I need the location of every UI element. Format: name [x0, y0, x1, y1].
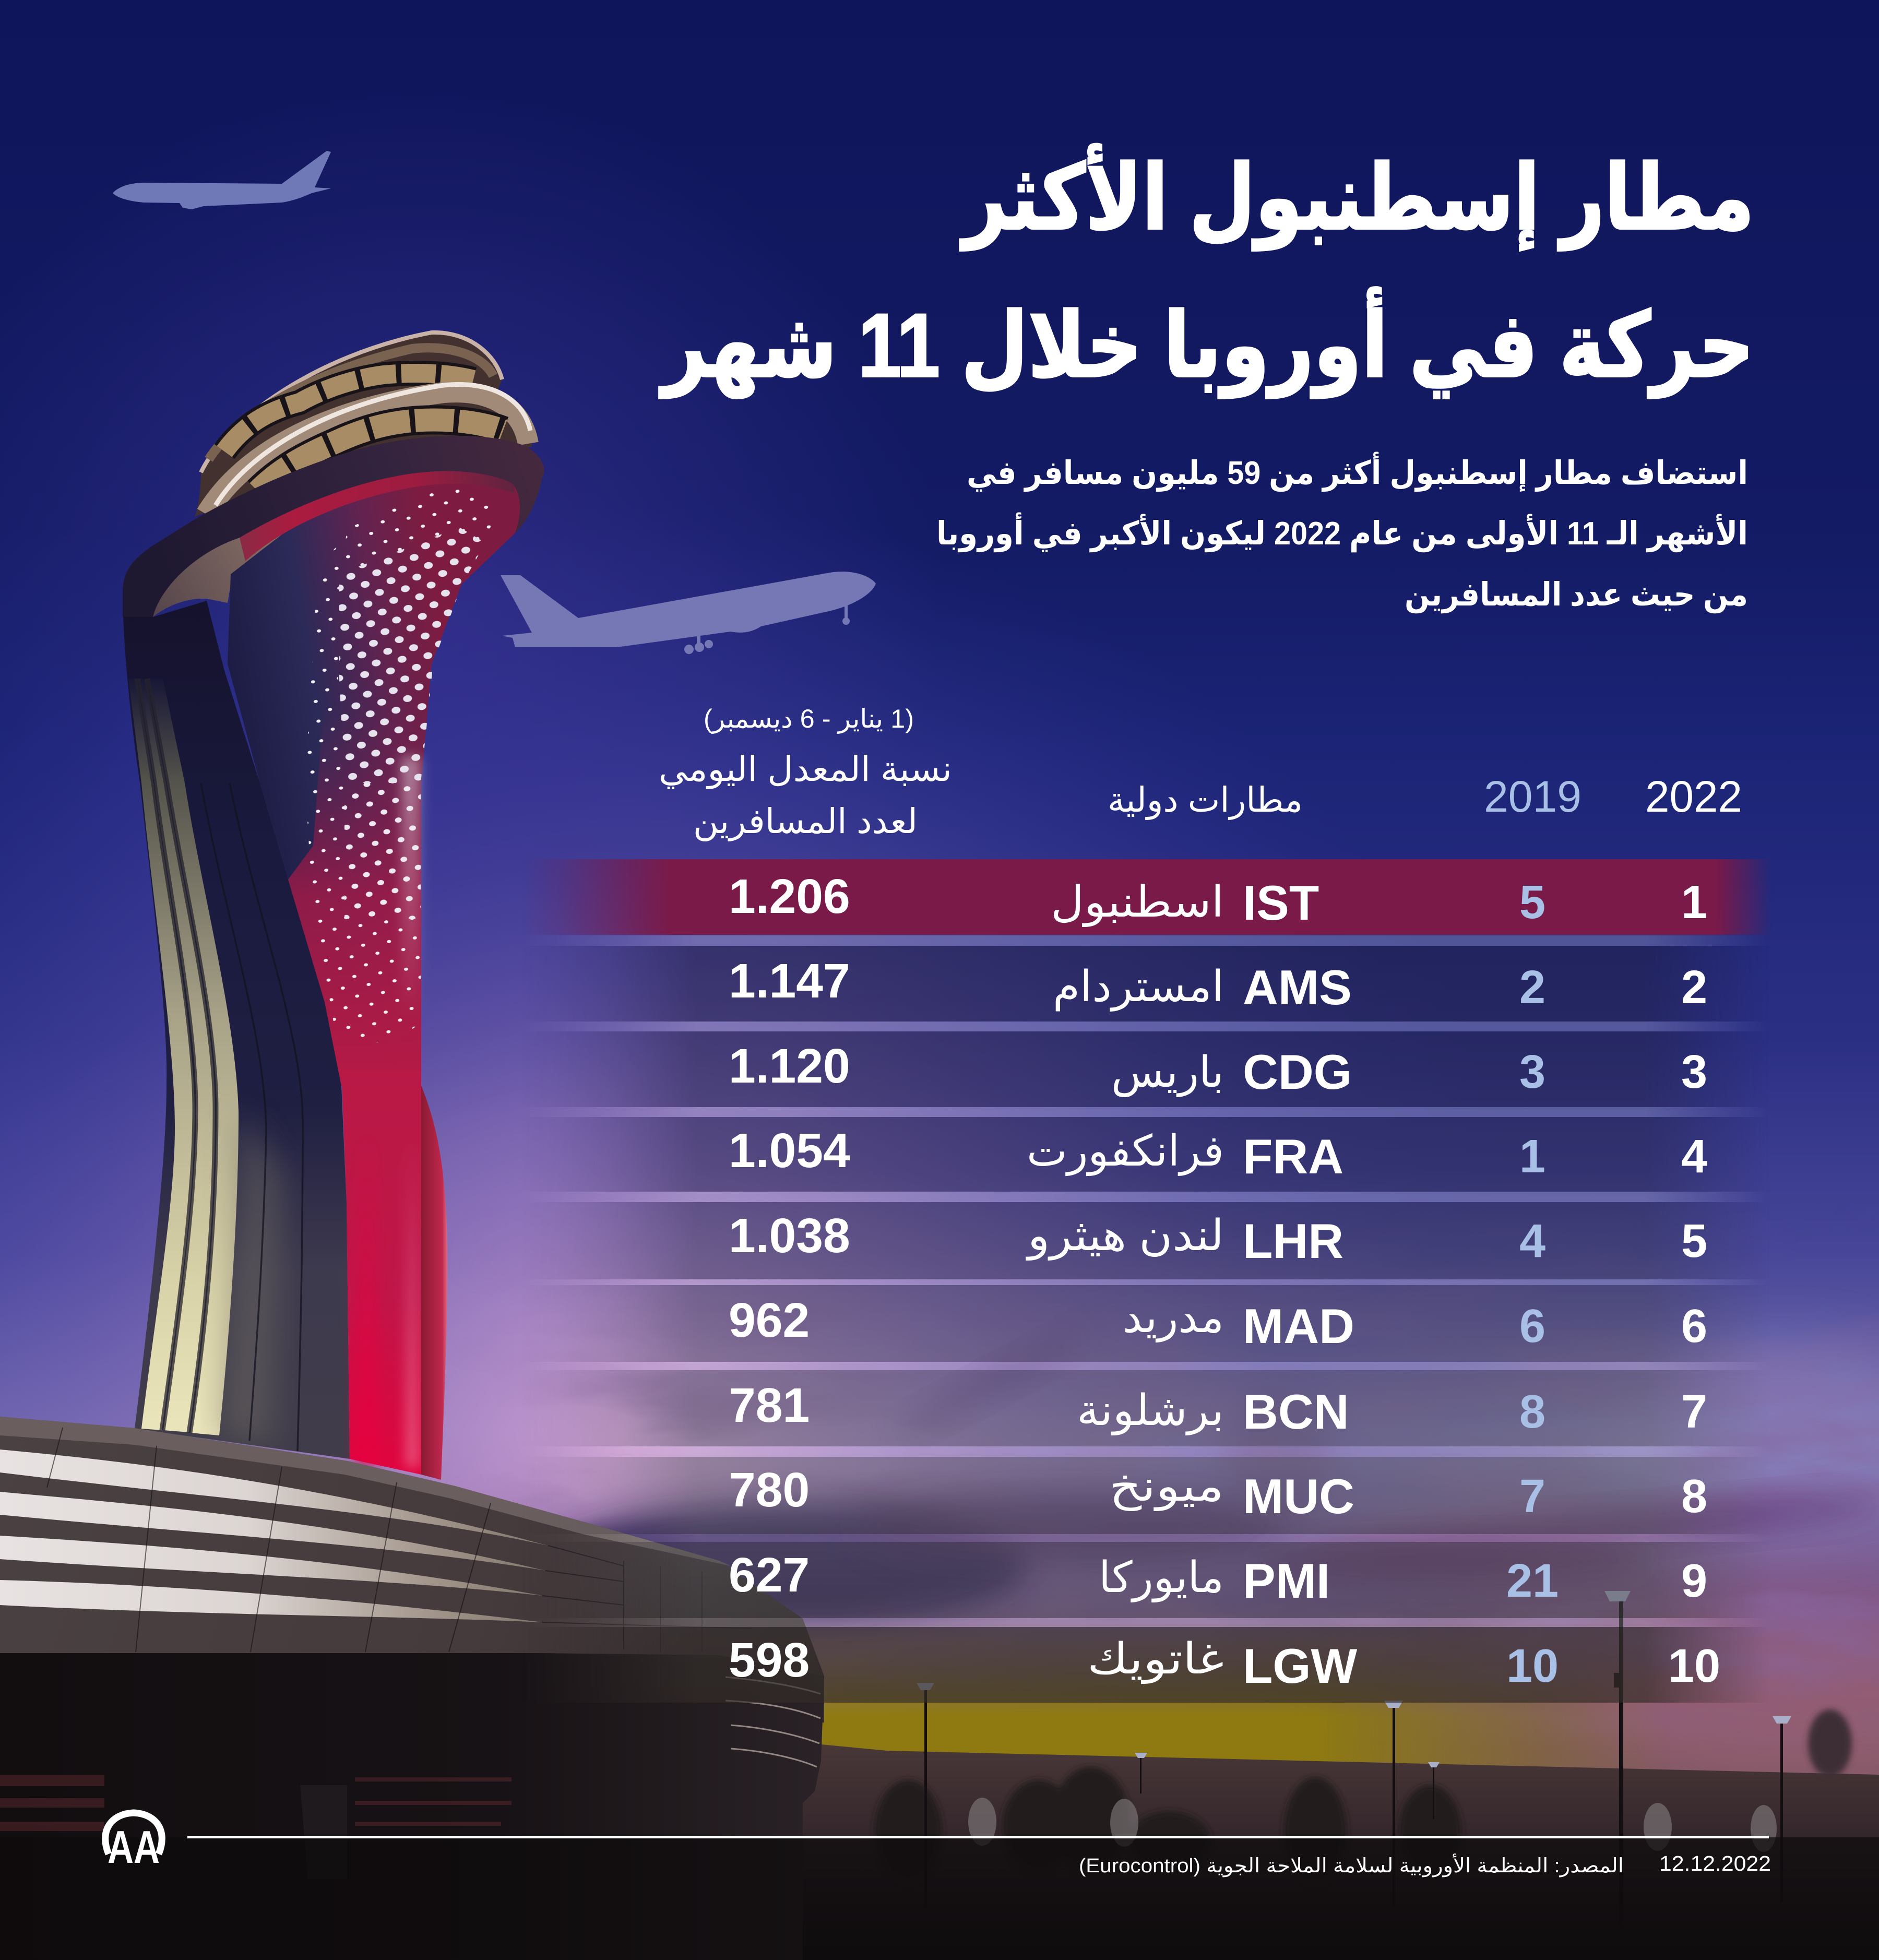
head lower windows	[258, 420, 503, 491]
row 8: MUC: 8	[1681, 1470, 1707, 1523]
row 3: CDG: 3	[1519, 1046, 1545, 1098]
funnel edge haze	[402, 757, 420, 1018]
row 7: BCN: 8	[1519, 1386, 1545, 1438]
row 7: BCN: BCN	[1243, 1384, 1349, 1439]
row 8: MUC: 780	[729, 1463, 810, 1517]
red bulge	[421, 1086, 447, 1480]
row 7: BCN: 7	[1681, 1386, 1707, 1438]
title	[659, 144, 1754, 399]
row 6: MAD: MAD	[1243, 1299, 1354, 1353]
row 6: MAD	[729, 1293, 1707, 1353]
building roof rim	[0, 1417, 731, 1566]
row 10: LGW: 10	[1506, 1640, 1559, 1692]
row 4: FRA: فرانكفورت	[1027, 1127, 1224, 1176]
underside column	[300, 1785, 347, 1879]
row 6: MAD: 6	[1681, 1300, 1707, 1352]
stem left glow	[355, 1122, 378, 1467]
row 9: PMI: مايوركا	[1099, 1554, 1224, 1602]
row 6: MAD: مدريد	[1123, 1294, 1224, 1343]
stripe shadow gaps	[137, 679, 216, 1433]
row 1: IST: 1.206	[729, 869, 850, 923]
row 2: AMS: 1.147	[729, 954, 850, 1008]
head lower window panes	[258, 420, 503, 491]
row 8: MUC	[729, 1463, 1707, 1524]
tower panel seams	[201, 783, 303, 1451]
row 5: LHR: 5	[1681, 1215, 1707, 1267]
red stem	[341, 1070, 421, 1475]
row 2: AMS: AMS	[1243, 960, 1352, 1015]
row 1: IST	[729, 869, 1707, 930]
row 2: AMS: 2	[1519, 961, 1545, 1014]
date: 12.12.2022	[1659, 1851, 1771, 1875]
tower soft lit panel	[219, 1112, 282, 1443]
row 6: MAD: 6	[1519, 1300, 1545, 1352]
table headers	[659, 704, 1742, 841]
tower dark collar band	[123, 436, 544, 617]
row 3: CDG: 3	[1681, 1046, 1707, 1098]
row 4: FRA: FRA	[1243, 1129, 1343, 1184]
head upper windows	[224, 373, 473, 452]
header: airports: مطارات دولية	[1108, 780, 1303, 820]
tower tan inner swoosh	[153, 533, 288, 617]
light poles	[917, 1591, 1791, 1928]
source: المصدر: المنظمة الأوروبية لسلامة الملاحة الجوية (Eurocontrol)	[1079, 1853, 1624, 1878]
facade panel lines	[47, 1428, 752, 1652]
head middle ring	[206, 392, 528, 514]
header: daily average: لعدد المسافرين	[693, 802, 918, 841]
row 1: IST: IST	[1243, 875, 1319, 930]
row 3: CDG: 1.120	[729, 1039, 850, 1093]
row 5: LHR: LHR	[1243, 1214, 1343, 1268]
row 5: LHR	[729, 1208, 1707, 1268]
row 7: BCN	[729, 1378, 1707, 1439]
row 4: FRA: 4	[1681, 1131, 1707, 1183]
tower head body	[195, 332, 532, 517]
row 3: CDG: CDG	[1243, 1044, 1352, 1099]
row 5: LHR: 4	[1519, 1215, 1545, 1267]
control tower	[123, 332, 544, 1480]
row 5: LHR: 1.038	[729, 1208, 850, 1263]
row 5: LHR: لندن هيثرو	[1026, 1212, 1224, 1261]
row 1: IST: 1	[1681, 876, 1707, 929]
clouds	[512, 1339, 1879, 1686]
row 2: AMS	[729, 954, 1707, 1015]
intro paragraph	[936, 452, 1748, 613]
tower cream stripes	[128, 679, 239, 1435]
title: حركة في أوروبا خلال 11 شهر	[659, 287, 1754, 399]
header: daily average	[659, 750, 952, 841]
head upper band	[209, 348, 493, 459]
highlighted row bar: Istanbul	[522, 859, 1775, 935]
row 9: PMI: 9	[1681, 1555, 1707, 1607]
row 4: FRA: 1	[1519, 1131, 1545, 1183]
row 1: IST: اسطنبول	[1051, 878, 1224, 927]
trees	[874, 1709, 1852, 1887]
red underside arc	[240, 471, 514, 561]
stem right highlight	[406, 1138, 419, 1467]
row 9: PMI	[729, 1548, 1707, 1608]
building lower dark facade	[0, 1653, 824, 1960]
tower left column and grey panel	[123, 589, 350, 1459]
row 10: LGW: LGW	[1243, 1638, 1358, 1693]
distant terminal building	[783, 1741, 1879, 1960]
header: 2022: 2022	[1645, 772, 1742, 821]
row 10: LGW: 10	[1668, 1640, 1720, 1692]
intro paragraph: من حيث عدد المسافرين	[1405, 577, 1748, 613]
small airplane silhouette	[113, 151, 331, 209]
row 9: PMI: 21	[1506, 1555, 1559, 1607]
title: مطار إسطنبول الأكثر	[959, 144, 1754, 251]
head middle ring highlight	[216, 385, 530, 505]
head top rim	[201, 332, 502, 472]
row 2: AMS: 2	[1681, 961, 1707, 1014]
tower funnel	[228, 470, 542, 1086]
row 7: BCN: برشلونة	[1077, 1387, 1224, 1435]
head upper window panes	[224, 373, 473, 452]
intro paragraph: استضاف مطار إسطنبول أكثر من 59 مليون مسافر في	[967, 452, 1748, 492]
row 9: PMI: PMI	[1243, 1553, 1330, 1608]
row 10: LGW	[729, 1633, 1720, 1693]
header: daily average: نسبة المعدل اليومي	[659, 750, 952, 789]
row 3: CDG: باريس	[1111, 1049, 1224, 1097]
row 9: PMI: 627	[729, 1548, 810, 1602]
row 1: IST: 5	[1519, 876, 1545, 929]
header: date range: (1 يناير - 6 ديسمبر)	[704, 704, 914, 734]
radar domes	[968, 1798, 1777, 1852]
row 8: MUC: ميونخ	[1109, 1463, 1224, 1511]
row 4: FRA	[729, 1123, 1707, 1184]
building upper facade	[0, 1417, 824, 1723]
logo: Anadolu Agency: AA	[108, 1821, 160, 1873]
facade light stripes	[0, 1450, 548, 1622]
row 6: MAD: 962	[729, 1293, 810, 1347]
LED dot pattern	[305, 482, 497, 1044]
intro paragraph: الأشهر الـ 11 الأولى من عام 2022 ليكون الأكبر في أوروبا	[936, 512, 1748, 553]
row 8: MUC: 7	[1519, 1470, 1545, 1523]
main terminal building	[0, 1417, 824, 1960]
row 2: AMS: امستردام	[1053, 963, 1224, 1012]
row 10: LGW: 598	[729, 1633, 810, 1687]
funnel red overlay	[288, 533, 515, 1086]
header: 2019: 2019	[1484, 772, 1581, 821]
row 10: LGW: غاتويك	[1087, 1635, 1224, 1684]
row 3: CDG	[729, 1039, 1707, 1099]
yellow horizon glow	[805, 1622, 1640, 1768]
footer rule	[187, 1836, 1769, 1838]
glazing strip	[0, 1775, 512, 1831]
row 4: FRA: 1.054	[729, 1123, 850, 1178]
row 7: BCN: 781	[729, 1378, 810, 1432]
right side highlights	[726, 1677, 820, 1767]
ground and footer shade	[0, 1837, 1879, 1960]
row 8: MUC: MUC	[1243, 1469, 1354, 1524]
table row bars	[522, 935, 1775, 1703]
large airplane silhouette	[501, 572, 876, 654]
